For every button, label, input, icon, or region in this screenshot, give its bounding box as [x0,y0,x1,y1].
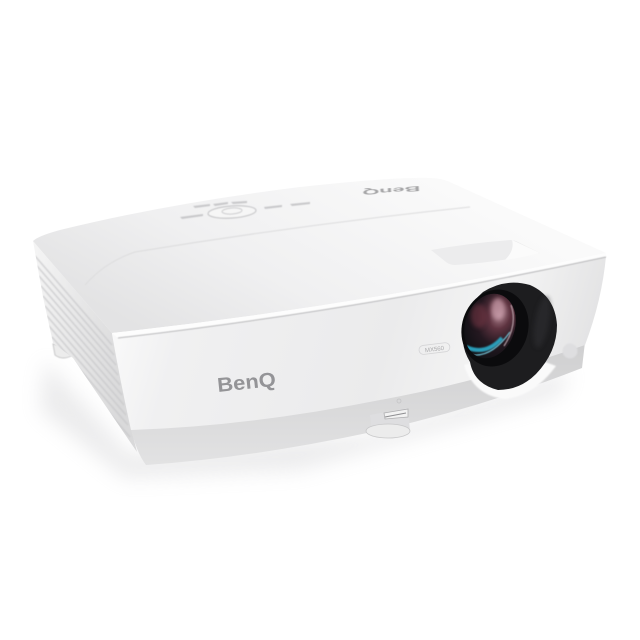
reversed logo on top: BenQ [362,184,420,197]
ground shadow [40,360,570,478]
projector body [33,178,606,465]
IR sensor [562,344,578,358]
control panel [180,201,310,220]
top recess line [85,207,470,285]
model badge: MX560 [425,346,445,354]
keypad buttons [180,214,203,219]
infographic: BenQ projector product view [33,184,606,480]
rear foot [53,344,73,358]
inner barrel [452,281,538,375]
lens hood [463,283,557,390]
focus-lens release icon [397,399,401,403]
navigation ring [208,204,256,220]
focus window [431,240,540,265]
side vent panel [33,241,137,452]
grey base band [130,342,585,465]
top surface [33,178,606,333]
front shell [112,256,606,430]
lens assembly [461,282,557,398]
model badge [419,342,450,355]
lens white collar [464,360,556,399]
lens glass [464,294,516,358]
front foot adjuster [366,408,410,438]
front logo: BenQ [216,369,277,397]
top edge trim [112,253,606,338]
